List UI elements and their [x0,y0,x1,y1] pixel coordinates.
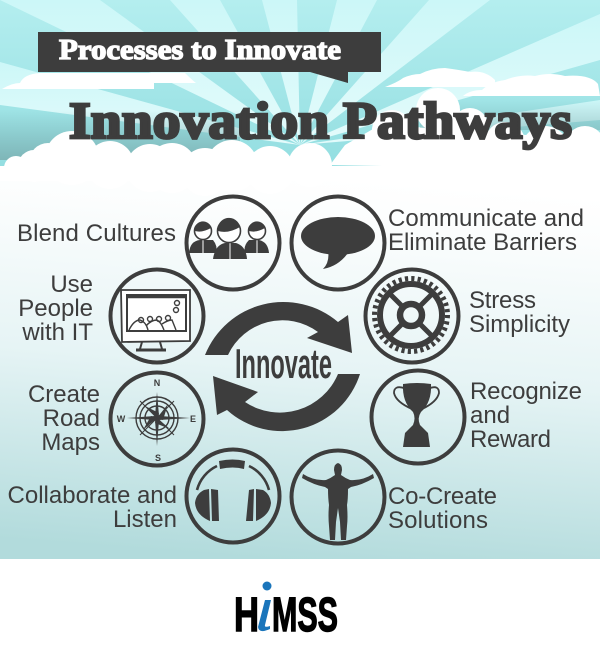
label: Collaborate and Listen: Collaborate and [8,482,177,509]
label: Use People with IT [18,271,93,346]
icon: compass: E [190,414,196,424]
label: Create Road Maps: Create [28,381,100,408]
label: Recognize and Reward: Reward [470,426,551,453]
label: Use People with IT: with IT [21,319,93,346]
label: Communicate and Eliminate Barriers: Eliminate Barriers [388,229,577,256]
label: Blend Cultures: Blend Cultures [17,220,176,247]
logo: HIMSS: H [234,589,259,642]
icon: compass: W [117,414,126,424]
label: Communicate and Eliminate Barriers [388,205,584,256]
icon: compass [110,372,204,466]
icon: monitor [110,270,204,362]
label: Stress Simplicity: Stress [469,287,536,314]
label: Stress Simplicity: Simplicity [469,311,570,338]
label: Create Road Maps: Road [43,405,100,432]
icon: speech bubble [292,196,384,290]
label: Use People with IT: Use [50,271,93,298]
icon: trophy [372,370,464,464]
center label: Innovate: Innovate [235,340,332,387]
icon: human figure [292,450,384,544]
banner: Processes to Innovate: Processes to Innovate [59,35,341,66]
icon: headphones [186,450,280,542]
label: Use People with IT: People [18,295,93,322]
label: Co-Create Solutions: Solutions [388,507,488,534]
sky with sunburst rays [0,0,600,190]
cycle arrows [205,302,360,431]
label: Recognize and Reward [470,378,582,453]
background panel gradient [0,178,600,559]
label: Recognize and Reward: Recognize [470,378,582,405]
label: Stress Simplicity [469,287,570,338]
logo: HIMSS: MSS [272,589,338,642]
label: Recognize and Reward: and [470,402,510,429]
label: Create Road Maps: Maps [41,429,100,456]
label: Collaborate and Listen [8,482,177,533]
logo: HIMSS [234,582,338,642]
title: Innovation Pathways [69,93,572,150]
label: Co-Create Solutions: Co-Create [388,483,497,510]
label: Communicate and Eliminate Barriers: Communicate and [388,205,584,232]
upper clouds [2,68,600,96]
label: Co-Create Solutions [388,483,497,534]
lower clouds [0,88,600,196]
icon: people [186,196,280,290]
icon: compass: N [154,378,160,388]
label: Create Road Maps [28,381,100,456]
icon: compass: S [155,453,161,463]
label: Collaborate and Listen: Listen [113,506,177,533]
icon: gear [366,270,458,362]
banner: Processes to Innovate [38,32,381,83]
